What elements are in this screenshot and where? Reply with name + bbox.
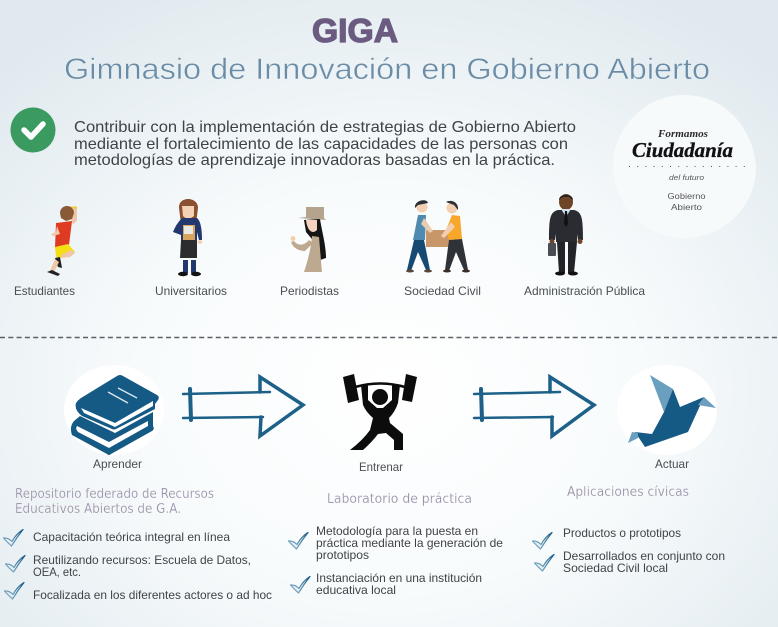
- arrow: entrenar to actuar: [474, 377, 594, 436]
- item: práctica mediante la generación de: [316, 536, 503, 550]
- item: Metodología para la puesta en: [316, 524, 478, 538]
- icon: university student: [173, 199, 202, 276]
- icon: origami bird: [617, 365, 717, 455]
- icon: books: [64, 365, 164, 455]
- label: Sociedad Civil: Sociedad Civil: [404, 284, 481, 298]
- badge: Formamos Ciudadanía: [613, 95, 756, 238]
- heading: Laboratorio: Laboratorio de práctica: [327, 492, 472, 507]
- badge text: Gobierno Abierto: Gobierno: [668, 191, 706, 201]
- label: Estudiantes: Estudiantes: [14, 284, 75, 298]
- icon: green check: [10, 108, 56, 152]
- mission statement: mediante el fortalecimiento de las capacidades de las personas con: [74, 136, 568, 153]
- item: Capacitación teórica integral en línea: [33, 530, 230, 544]
- item: prototipos: [316, 548, 369, 562]
- badge text: Ciudadanía: Ciudadanía: [632, 138, 733, 162]
- item: Productos o prototipos: [563, 526, 681, 540]
- badge text: del futuro: del futuro: [669, 173, 704, 182]
- heading: Repositorio: Educativos Abiertos de G.A.: [15, 502, 181, 517]
- label: Entrenar: Entrenar: [359, 460, 403, 474]
- labels: audiences: [14, 284, 645, 298]
- mission statement: Contribuir con la implementación de estrategias de Gobierno Abierto: [74, 119, 576, 136]
- icon: public administration officer: [548, 194, 583, 276]
- icon: student running: [47, 206, 77, 276]
- badge text: Formamos: Formamos: [657, 128, 708, 140]
- icon: civil society people with box: [406, 200, 470, 272]
- badge text: Gobierno Abierto: Abierto: [671, 202, 702, 212]
- list: entrenar: [288, 524, 503, 597]
- heading: Repositorio: Repositorio federado de Recursos: [15, 487, 214, 502]
- arrow: aprender to entrenar: [183, 377, 303, 436]
- item: educativa local: [316, 583, 396, 597]
- item: Desarrollados en conjunto con: [563, 549, 725, 563]
- icon: weightlifter: [343, 374, 417, 450]
- list: actuar: [532, 526, 725, 575]
- item: Focalizada en los diferentes actores o ad hoc: [33, 588, 272, 602]
- label: Actuar: Actuar: [655, 457, 689, 471]
- badge dotted divider: [629, 166, 745, 168]
- mission statement: metodologías de aprendizaje innovadoras basadas en la práctica.: [74, 152, 555, 169]
- list: aprender: [4, 530, 272, 602]
- icon: journalist: [290, 207, 326, 272]
- title: GIGA: [312, 12, 398, 49]
- subtitle: Gimnasio de Innovación en Gobierno Abierto: [64, 53, 710, 86]
- item: Instanciación en una institución: [316, 571, 482, 585]
- label: Administración Pública: Administración Pública: [524, 284, 645, 298]
- label: Universitarios: Universitarios: [155, 284, 227, 298]
- label: Periodistas: Periodistas: [280, 284, 339, 298]
- item: Reutilizando recursos: Escuela de Datos,: [33, 553, 251, 567]
- heading: Aplicaciones: Aplicaciones cívicas: [567, 485, 689, 500]
- item: OEA, etc.: [33, 565, 81, 579]
- label: Aprender: Aprender: [93, 457, 142, 471]
- item: Sociedad Civil local: [563, 561, 668, 575]
